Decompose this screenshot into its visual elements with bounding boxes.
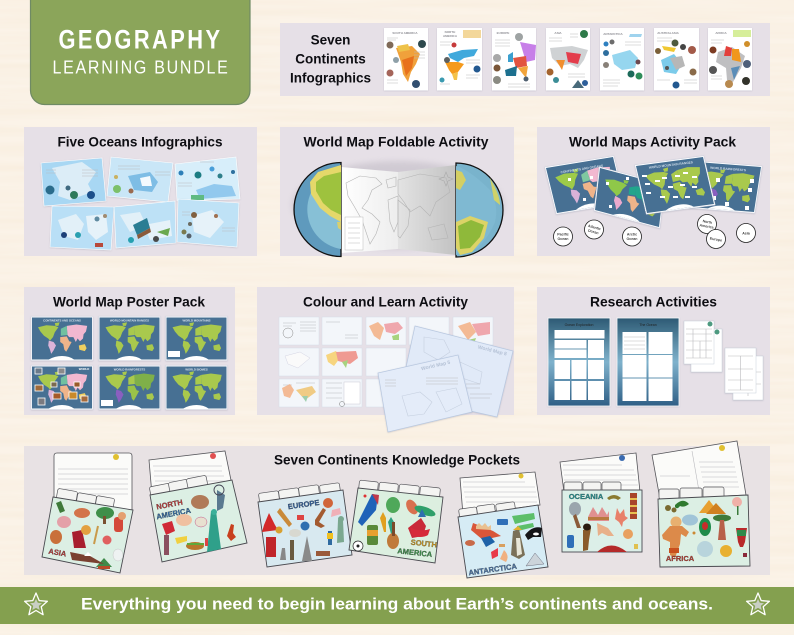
label circle: europe xyxy=(706,230,726,248)
ocean sheet 4 xyxy=(50,206,114,250)
heading: Infographics xyxy=(290,70,371,86)
poster: antarctica xyxy=(600,28,644,90)
poster: world biomes photos xyxy=(31,365,93,410)
activity map: world mountain ranges xyxy=(635,156,715,214)
research sheet 1 xyxy=(548,318,610,406)
pocket: south america xyxy=(349,480,443,563)
poster: europe xyxy=(492,28,536,90)
poster: africa: AFRICA xyxy=(715,31,727,35)
label circle: north america xyxy=(698,214,716,234)
research sheet 2: The Ocean xyxy=(639,323,657,327)
label circle: atlantic ocean: Atlantic xyxy=(588,224,601,231)
heading: Seven Continents Knowledge Pockets xyxy=(274,452,520,468)
panel: seven continents knowledge pockets xyxy=(24,441,770,578)
title block xyxy=(30,0,250,104)
pocket: antarctica xyxy=(458,472,548,578)
label circle: asia: Asia xyxy=(742,232,751,236)
large colouring map 1: World Map 8 xyxy=(477,345,508,358)
activity map: world rainforests: WORLD RAINFORESTS xyxy=(710,166,746,172)
panel: world map poster pack xyxy=(24,287,235,415)
thumbnail grid xyxy=(279,317,493,407)
pocket: north america: NORTH xyxy=(156,498,183,512)
small worksheet pair 2 xyxy=(725,348,763,400)
banner xyxy=(0,587,794,624)
poster: australasia xyxy=(654,28,699,90)
panel: seven continents infographics xyxy=(280,23,770,96)
title: geography: GEOGRAPHY xyxy=(58,24,222,54)
large colouring map 1 xyxy=(400,326,513,417)
pocket: asia xyxy=(42,453,133,573)
ocean sheet 1 xyxy=(41,158,106,206)
label circle: europe: Europe xyxy=(709,236,722,243)
small worksheet pair 1 xyxy=(684,321,722,372)
poster: asia xyxy=(546,28,590,90)
poster: world biomes xyxy=(166,365,227,410)
ocean sheet 2 xyxy=(107,157,173,202)
heading: Continents xyxy=(295,52,366,66)
activity map: continents labels xyxy=(594,167,665,228)
label circle: arctic ocean: Ocean xyxy=(626,237,638,241)
research sheet 1: Ocean Exploration xyxy=(565,323,593,327)
label circle: asia xyxy=(736,224,756,242)
activity map: continents and oceans: CONTINENTS AND OCEANS xyxy=(560,164,603,174)
heading: World Map Foldable Activity xyxy=(304,134,489,150)
pocket: south america: SOUTH xyxy=(410,538,437,549)
poster: europe: EUROPE xyxy=(497,31,509,35)
poster: africa xyxy=(708,28,752,90)
label circle: north america: North xyxy=(702,219,712,225)
ocean sheet 5 xyxy=(114,201,176,248)
pocket: antarctica: ANTARCTICA xyxy=(468,562,518,577)
poster: continents and oceans xyxy=(31,316,93,361)
pocket: africa xyxy=(652,441,750,567)
subtitle: learning bundle: LEARNING BUNDLE xyxy=(52,56,230,78)
panel: world maps activity pack xyxy=(537,127,770,256)
poster: world mountain ranges: WORLD MOUNTAIN RANGES xyxy=(110,318,149,322)
research sheet 2 xyxy=(617,318,679,406)
label circle: atlantic ocean: Ocean xyxy=(587,229,599,235)
label circle: pacific ocean xyxy=(554,227,572,246)
label circle: north america: America xyxy=(699,223,715,230)
foldable map sheet xyxy=(341,165,456,255)
icon: star left xyxy=(25,593,47,615)
poster: asia: ASIA xyxy=(554,31,562,35)
poster: australasia: AUSTRALASIA xyxy=(657,31,680,35)
poster: south america xyxy=(384,28,428,90)
label circle: atlantic ocean xyxy=(584,220,604,239)
panel: colour and learn activity xyxy=(257,287,514,432)
pocket: europe: EUROPE xyxy=(287,498,320,511)
poster: world rainforests xyxy=(99,365,160,410)
poster: continents and oceans: CONTINENTS AND OCEANS xyxy=(43,318,81,322)
heading: Five Oceans Infographics xyxy=(58,134,223,150)
pocket: africa: AFRICA xyxy=(666,554,695,563)
pocket: oceania: OCEANIA xyxy=(569,492,604,501)
panel: research activities xyxy=(537,287,770,415)
label circle: arctic ocean: Arctic xyxy=(627,232,637,236)
poster: antarctica: ANTARCTICA xyxy=(603,32,624,36)
poster: world mountain ranges xyxy=(99,316,160,361)
pocket: south america: AMERICA xyxy=(397,546,433,559)
ocean sheet 3 xyxy=(175,157,240,201)
panel: world map foldable activity xyxy=(280,127,514,257)
poster: world biomes: WORLD BIOMES xyxy=(185,368,208,372)
label circle: pacific ocean: Ocean xyxy=(558,237,568,241)
heading: Research Activities xyxy=(590,294,717,310)
label circle: pacific ocean: Pacific xyxy=(557,232,569,236)
poster: world rainforests: WORLD RAINFORESTS xyxy=(114,368,145,372)
banner text: Everything you need to begin learning about Earth’s continents and oceans. xyxy=(81,594,713,614)
heading: World Map Poster Pack xyxy=(53,294,205,310)
activity map: world mountain ranges: WORLD MOUNTAIN RANGES xyxy=(649,160,693,170)
label circle: arctic ocean xyxy=(622,227,642,246)
panel: five oceans infographics xyxy=(24,127,257,256)
large colouring map 2: World Map 5 xyxy=(421,360,451,372)
pocket: north america: AMERICA xyxy=(155,506,192,521)
heading: Colour and Learn Activity xyxy=(303,294,468,310)
poster: world mountains xyxy=(166,316,227,361)
globe: right half xyxy=(456,163,503,257)
heading: World Maps Activity Pack xyxy=(569,134,736,150)
poster: north america: AMERICA xyxy=(443,34,458,38)
pocket: asia: ASIA xyxy=(48,547,68,559)
heading: Seven xyxy=(311,32,350,48)
pocket: europe xyxy=(258,483,352,567)
icon: star right xyxy=(747,593,769,615)
poster: north america xyxy=(437,28,482,90)
pocket: north america xyxy=(149,451,247,562)
poster: world biomes photos: WORLD xyxy=(79,367,89,371)
ocean sheet 6 xyxy=(177,199,239,247)
poster: south america: SOUTH AMERICA xyxy=(392,31,418,35)
globe: left half xyxy=(294,162,341,256)
pocket: oceania xyxy=(560,453,642,552)
poster: north america: NORTH xyxy=(445,30,455,34)
poster: world mountains: WORLD MOUNTAINS xyxy=(182,318,211,322)
activity map: continents and oceans xyxy=(545,156,625,214)
large colouring map 2 xyxy=(378,355,472,432)
activity map: world rainforests xyxy=(689,161,762,213)
